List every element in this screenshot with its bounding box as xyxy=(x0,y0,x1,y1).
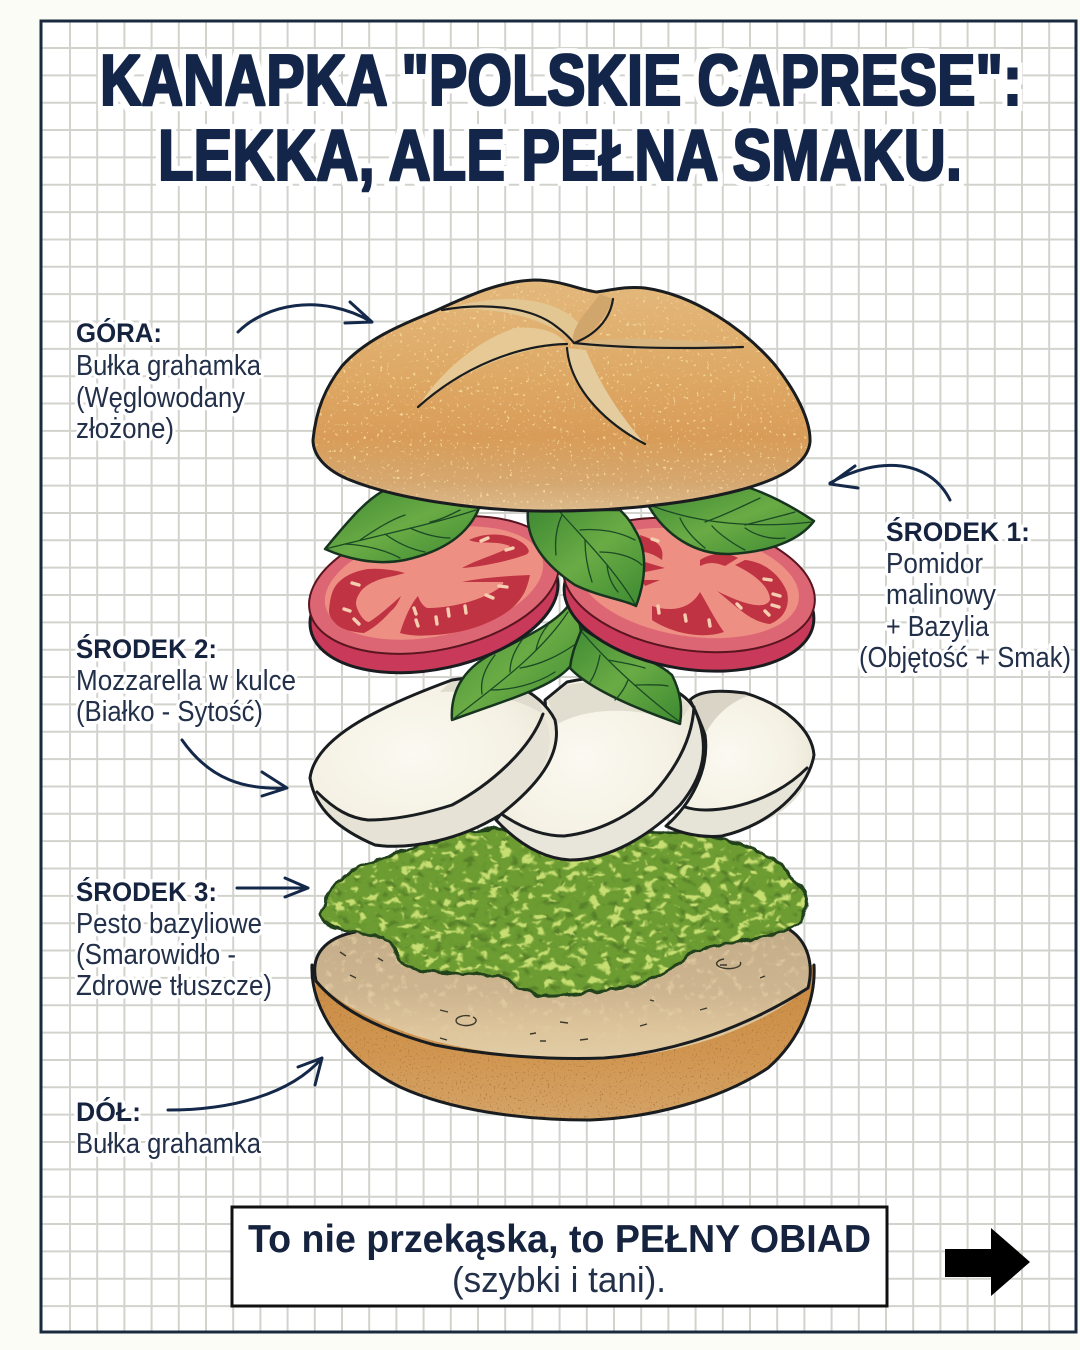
label: middle 1: malinowy xyxy=(886,579,996,611)
callout box: (szybki i tani). xyxy=(452,1259,666,1300)
mozzarella left slice xyxy=(310,677,557,846)
label: middle 3: ŚRODEK 3: xyxy=(76,876,217,907)
basil leaf centre xyxy=(528,510,644,606)
label: bottom: DÓŁ: xyxy=(76,1096,141,1127)
label: middle 2: Mozzarella w kulce xyxy=(76,665,296,697)
label: top xyxy=(76,317,262,445)
label: middle 3: (Smarowidło - xyxy=(76,939,236,971)
exploded sandwich illustration xyxy=(296,280,825,1120)
arrow: middle 3 label to pesto xyxy=(237,878,308,897)
label: middle 3: Zdrowe tłuszcze) xyxy=(76,970,272,1002)
basil leaf upper left xyxy=(325,490,479,562)
basil leaf lower right xyxy=(570,628,681,724)
label: middle 1: + Bazylia xyxy=(886,611,990,643)
label: middle 2: (Białko - Sytość) xyxy=(76,696,263,728)
arrow: top label to bun xyxy=(238,302,372,332)
mozzarella middle slice xyxy=(496,677,703,860)
top bun xyxy=(313,280,810,511)
arrow: middle 2 label to mozzarella xyxy=(182,740,287,796)
label: bottom: Bułka grahamka xyxy=(76,1128,262,1160)
label: middle 3 xyxy=(76,876,272,1002)
label: top: Bułka grahamka xyxy=(76,350,262,382)
label: middle 3: Pesto bazyliowe xyxy=(76,908,262,940)
icon: next arrow xyxy=(945,1228,1030,1296)
mozzarella right slice xyxy=(666,691,814,836)
pesto layer xyxy=(320,829,807,996)
label: top: złożone) xyxy=(76,413,174,445)
bun crease highlights xyxy=(418,294,743,444)
callout box xyxy=(232,1207,887,1306)
label: middle 1: ŚRODEK 1: xyxy=(886,516,1030,547)
arrow: bottom label to bun xyxy=(168,1058,322,1110)
label: top: (Węglowodany xyxy=(76,382,245,414)
basil leaf lower left xyxy=(452,603,581,720)
title xyxy=(100,41,1022,196)
arrow: middle 1 label to tomato xyxy=(830,465,950,500)
label: bottom xyxy=(76,1096,262,1160)
basil leaf upper right xyxy=(648,488,814,554)
label: middle 2 xyxy=(76,633,296,728)
tomato slice left xyxy=(296,495,572,694)
label: middle 1: Pomidor xyxy=(886,548,983,580)
label: top: GÓRA: xyxy=(76,317,162,348)
label: middle 1 xyxy=(859,516,1071,674)
callout box: To nie przekąska, to PEŁNY OBIAD xyxy=(248,1218,871,1261)
label: middle 2: ŚRODEK 2: xyxy=(76,633,217,664)
tomato slice right xyxy=(553,501,825,688)
mozzarella slices xyxy=(310,677,814,860)
bottom bun xyxy=(312,926,814,1120)
